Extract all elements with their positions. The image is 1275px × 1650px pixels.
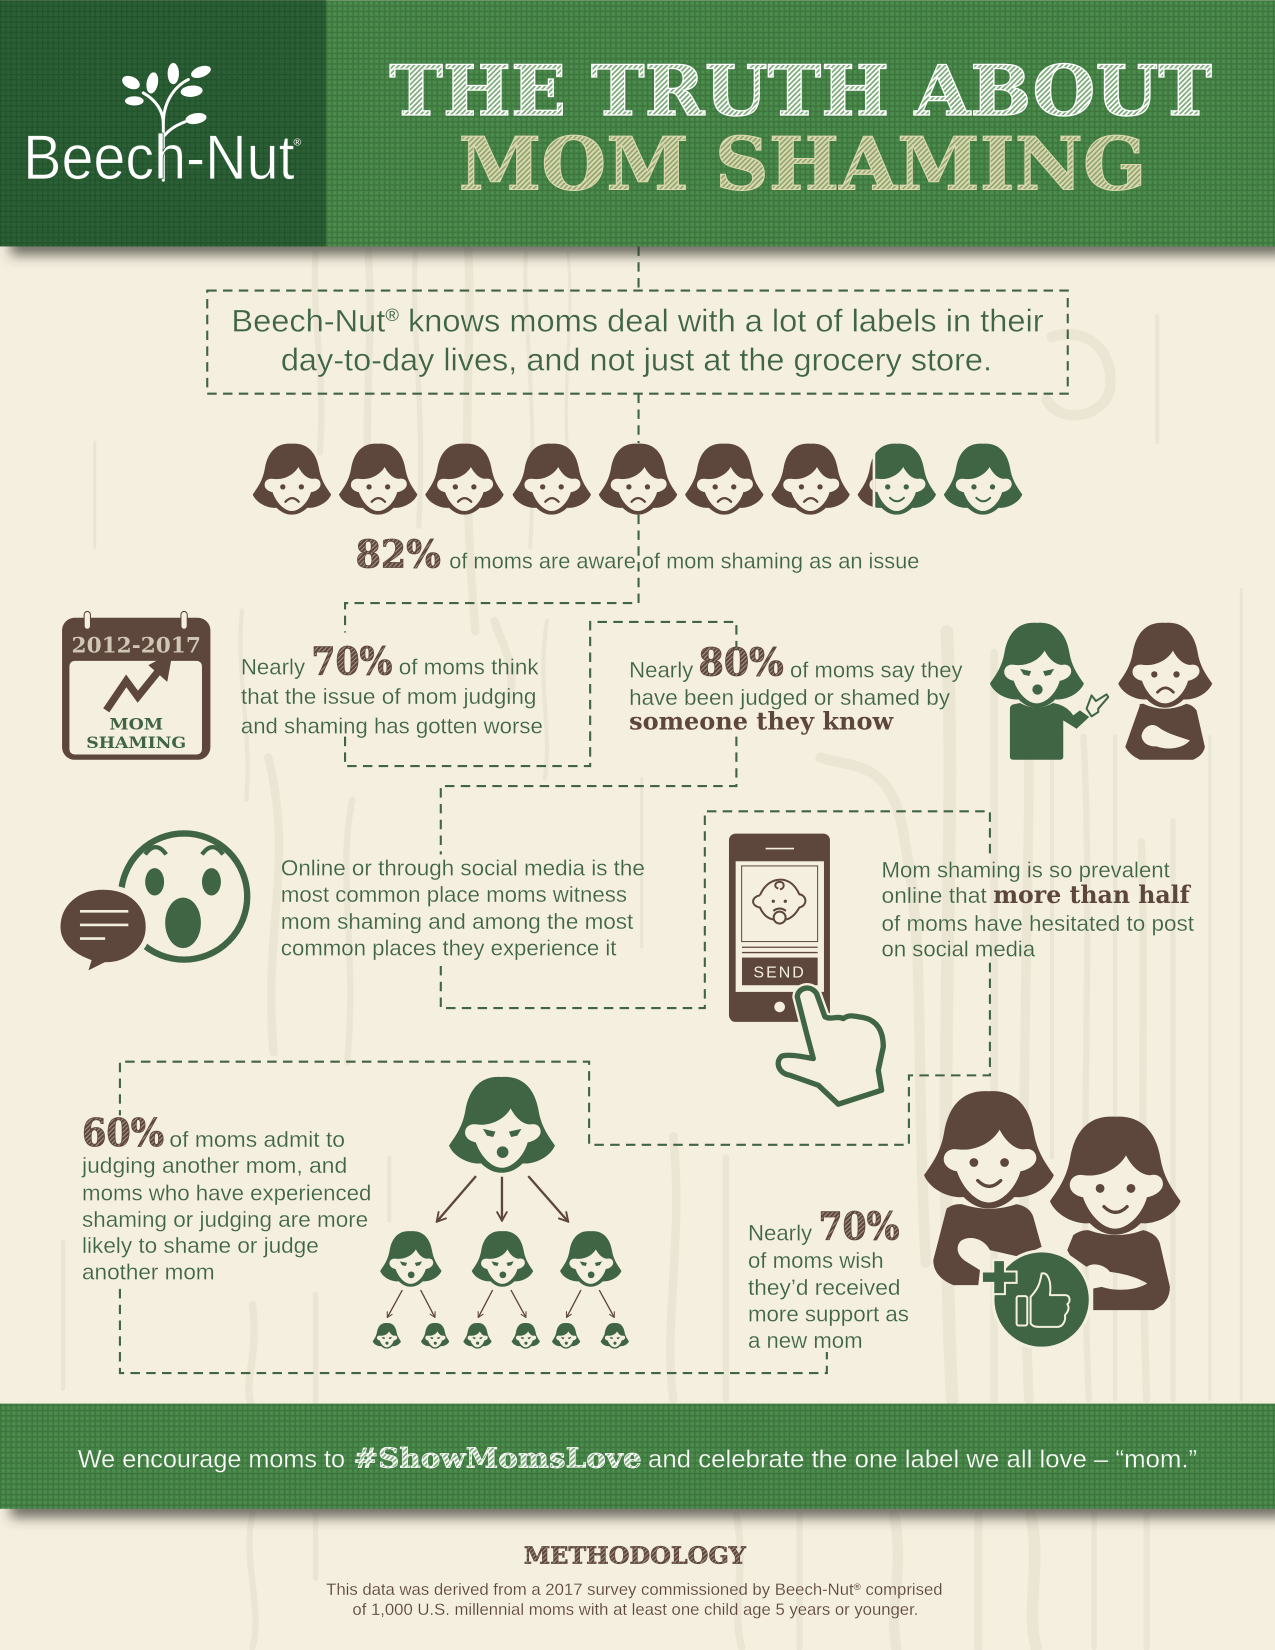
- text: more than half hesitated to post: more than half: [993, 880, 1191, 909]
- text: 60% judging another mom: moms who have experienced: [82, 1181, 371, 1206]
- text: nearly 70% wish for more support: 70%: [818, 1203, 899, 1248]
- text: online and social media: [281, 855, 645, 960]
- footer banner: We encourage moms to: [78, 1446, 345, 1474]
- logo: Beech-Nut tree and wordmark: Beech-Nut: [23, 123, 295, 193]
- icon: calendar 2012-2017: [62, 611, 210, 760]
- icon: shaming pyramid of moms with arrows: [373, 1077, 629, 1349]
- text: nearly 70% gotten worse: of moms think: [399, 655, 539, 680]
- text: nearly 70% wish for more support: [748, 1203, 909, 1353]
- text: 60% judging another mom: judging another mom, and: [81, 1153, 347, 1178]
- text: nearly 70% wish for more support: a new mom: [748, 1328, 863, 1353]
- text: nearly 70% wish for more support: they’d received: [748, 1275, 900, 1300]
- logo panel: [0, 0, 326, 246]
- intro box: ®: [385, 305, 399, 325]
- text: online and social media: common places they experience it: [281, 935, 617, 960]
- text: nearly 70% gotten worse: Nearly: [241, 655, 306, 680]
- text: 60% judging another mom: shaming or judging are more: [82, 1207, 368, 1232]
- methodology text: of 1,000 U.S. millennial moms with at least one child age 5 years or younger.: [352, 1601, 918, 1619]
- text: online and social media: Online or through social media is the: [281, 855, 645, 880]
- logo: Beech-Nut tree and wordmark: ®: [294, 136, 302, 148]
- text: 60% judging another mom: of moms admit to: [169, 1127, 345, 1152]
- methodology text: comprised: [861, 1581, 943, 1599]
- title: MOM SHAMING: [459, 123, 1147, 208]
- methodology text: [326, 1581, 943, 1619]
- text: nearly 70% gotten worse: that the issue of mom judging: [241, 684, 537, 709]
- header band: [0, 0, 1275, 246]
- dashed connector path: [120, 246, 990, 1373]
- icon: calendar 2012-2017: SHAMING: [86, 733, 186, 752]
- intro box: Beech-Nut: [231, 303, 380, 339]
- logo: Beech-Nut tree and wordmark: [23, 63, 302, 193]
- icon: shocked face and speech bubble: [58, 833, 247, 975]
- text: nearly 70% gotten worse: [241, 639, 543, 738]
- text: nearly 70% gotten worse: 70%: [311, 639, 392, 684]
- stat: 82%: [356, 531, 919, 576]
- methodology heading: METHODOLOGY: [524, 1542, 746, 1569]
- text: 60% judging another mom: likely to shame or judge: [82, 1233, 319, 1258]
- intro box: day-to-day lives, and not just at the grocery store.: [281, 342, 992, 378]
- text: more than half hesitated to post: [882, 858, 1195, 961]
- methodology text: This data was derived from a 2017 survey commissioned by Beech-Nut: [326, 1581, 841, 1599]
- stat: 82%: of moms are aware of mom shaming as an issue: [449, 548, 919, 573]
- icon: phone with baby photo and hand: [729, 834, 883, 1104]
- text: nearly 70% wish for more support: more support as: [748, 1302, 909, 1327]
- text: 60% judging another mom: 60%: [82, 1110, 164, 1155]
- text: nearly 70% gotten worse: and shaming has gotten worse: [241, 713, 543, 738]
- text: online and social media: most common place moms witness: [281, 882, 627, 907]
- shadow under footer banner: [11, 1498, 1275, 1517]
- intro box: knows moms deal with a lot of labels in their: [399, 303, 1044, 339]
- stat: 82%: 82%: [356, 531, 441, 576]
- icon: calendar 2012-2017: 2012-2017: [72, 632, 201, 657]
- text: online and social media: mom shaming and among the most: [281, 909, 634, 934]
- icon: phone with baby photo and hand: SEND: [753, 965, 806, 982]
- text: nearly 80% judged: Nearly: [629, 658, 694, 683]
- text: nearly 80% judged: someone they know: [629, 706, 894, 735]
- text: more than half hesitated to post: on social media: [882, 936, 1036, 961]
- icon: two happy moms with plus and thumbs up: [924, 1091, 1181, 1348]
- text: more than half hesitated to post: online that: [882, 883, 987, 908]
- shadow under header: [11, 236, 1275, 255]
- text: nearly 70% wish for more support: of moms wish: [748, 1248, 884, 1273]
- intro box: [207, 291, 1068, 394]
- title: [389, 51, 1212, 208]
- text: nearly 80% judged: of moms say they: [790, 658, 963, 683]
- text: nearly 80% judged: have been judged or shamed by: [629, 685, 951, 710]
- text: nearly 80% judged: [629, 640, 963, 735]
- footer banner: [0, 1404, 1275, 1509]
- text: nearly 70% wish for more support: Nearly: [748, 1221, 813, 1246]
- text: 60% judging another mom: [81, 1110, 371, 1284]
- icon: mom pointing at sad mom with baby: [990, 623, 1212, 760]
- text: nearly 80% judged: 80%: [699, 640, 784, 685]
- footer banner: #ShowMomsLove: [353, 1443, 642, 1475]
- footer banner: and celebrate the one label we all love – “mom.”: [648, 1446, 1197, 1474]
- icon: calendar 2012-2017: MOM: [109, 714, 163, 733]
- methodology text: ®: [854, 1582, 861, 1593]
- text: more than half hesitated to post: Mom shaming is so prevalent: [882, 858, 1171, 883]
- text: more than half hesitated to post: of moms have hesitated to post: [882, 911, 1195, 936]
- icon row: nine mom faces: [253, 444, 1022, 515]
- title: THE TRUTH ABOUT: [389, 51, 1212, 132]
- text: 60% judging another mom: another mom: [82, 1259, 215, 1284]
